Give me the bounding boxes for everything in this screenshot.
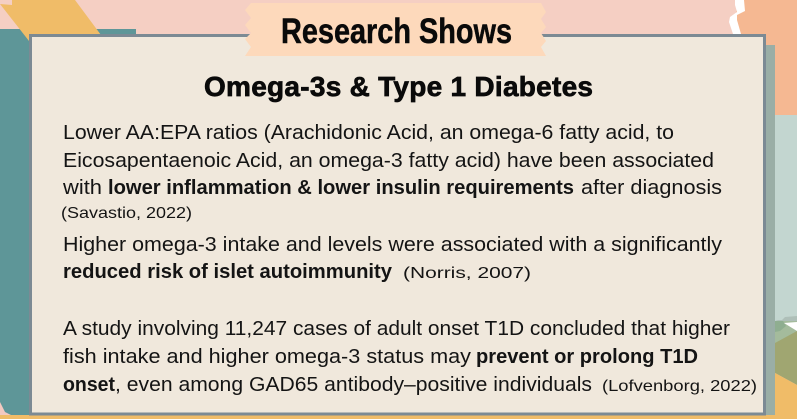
background: peach torn paper	[729, 0, 797, 116]
text block: islet autoimmunity: (Norris, 2007)	[403, 265, 531, 282]
text block: adult onset study: prevent or prolong T1D	[476, 346, 698, 368]
text block: AA:EPA ratios: (Savastio, 2022)	[61, 205, 192, 222]
background: orange bottom strip	[0, 415, 797, 419]
text block: islet autoimmunity	[63, 234, 722, 283]
background: pink corner bottom left	[0, 402, 11, 415]
background: orange tape	[0, 0, 101, 41]
text block: islet autoimmunity: Higher omega-3 intake and levels were associated with a significantly	[63, 234, 722, 256]
background: teal block	[0, 29, 136, 415]
text block: adult onset study: A study involving 11,247 cases of adult onset T1D concluded that higher	[63, 318, 730, 340]
text block: adult onset study	[63, 318, 757, 396]
text block: adult onset study: (Lofvenborg, 2022)	[602, 378, 757, 395]
text block: AA:EPA ratios: Eicosapentaenoic Acid, an omega-3 fatty acid) have been associated	[63, 150, 714, 172]
text block: AA:EPA ratios: with	[62, 177, 102, 199]
subheading: Omega-3s & Type 1 Diabetes	[204, 71, 593, 102]
text block: islet autoimmunity: reduced risk of islet autoimmunity	[63, 261, 393, 283]
background: pale teal panel	[775, 115, 797, 323]
text block: adult onset study: onset	[63, 374, 115, 396]
heading ribbon	[245, 3, 546, 56]
text block: adult onset study: fish intake and higher omega-3 status may	[63, 346, 471, 368]
text block: AA:EPA ratios	[61, 122, 722, 222]
text block: adult onset study: , even among GAD65 antibody–positive individuals	[115, 374, 592, 396]
text block: AA:EPA ratios: lower inflammation & lower insulin requirements	[108, 177, 574, 199]
background: bottom right landscape	[775, 316, 797, 419]
heading: Research Shows	[281, 12, 512, 51]
background: grey-green strip on the right	[766, 45, 775, 415]
text block: AA:EPA ratios: Lower AA:EPA ratios (Arachidonic Acid, an omega-6 fatty acid, to	[63, 122, 674, 144]
text block: AA:EPA ratios: after diagnosis	[581, 177, 722, 199]
